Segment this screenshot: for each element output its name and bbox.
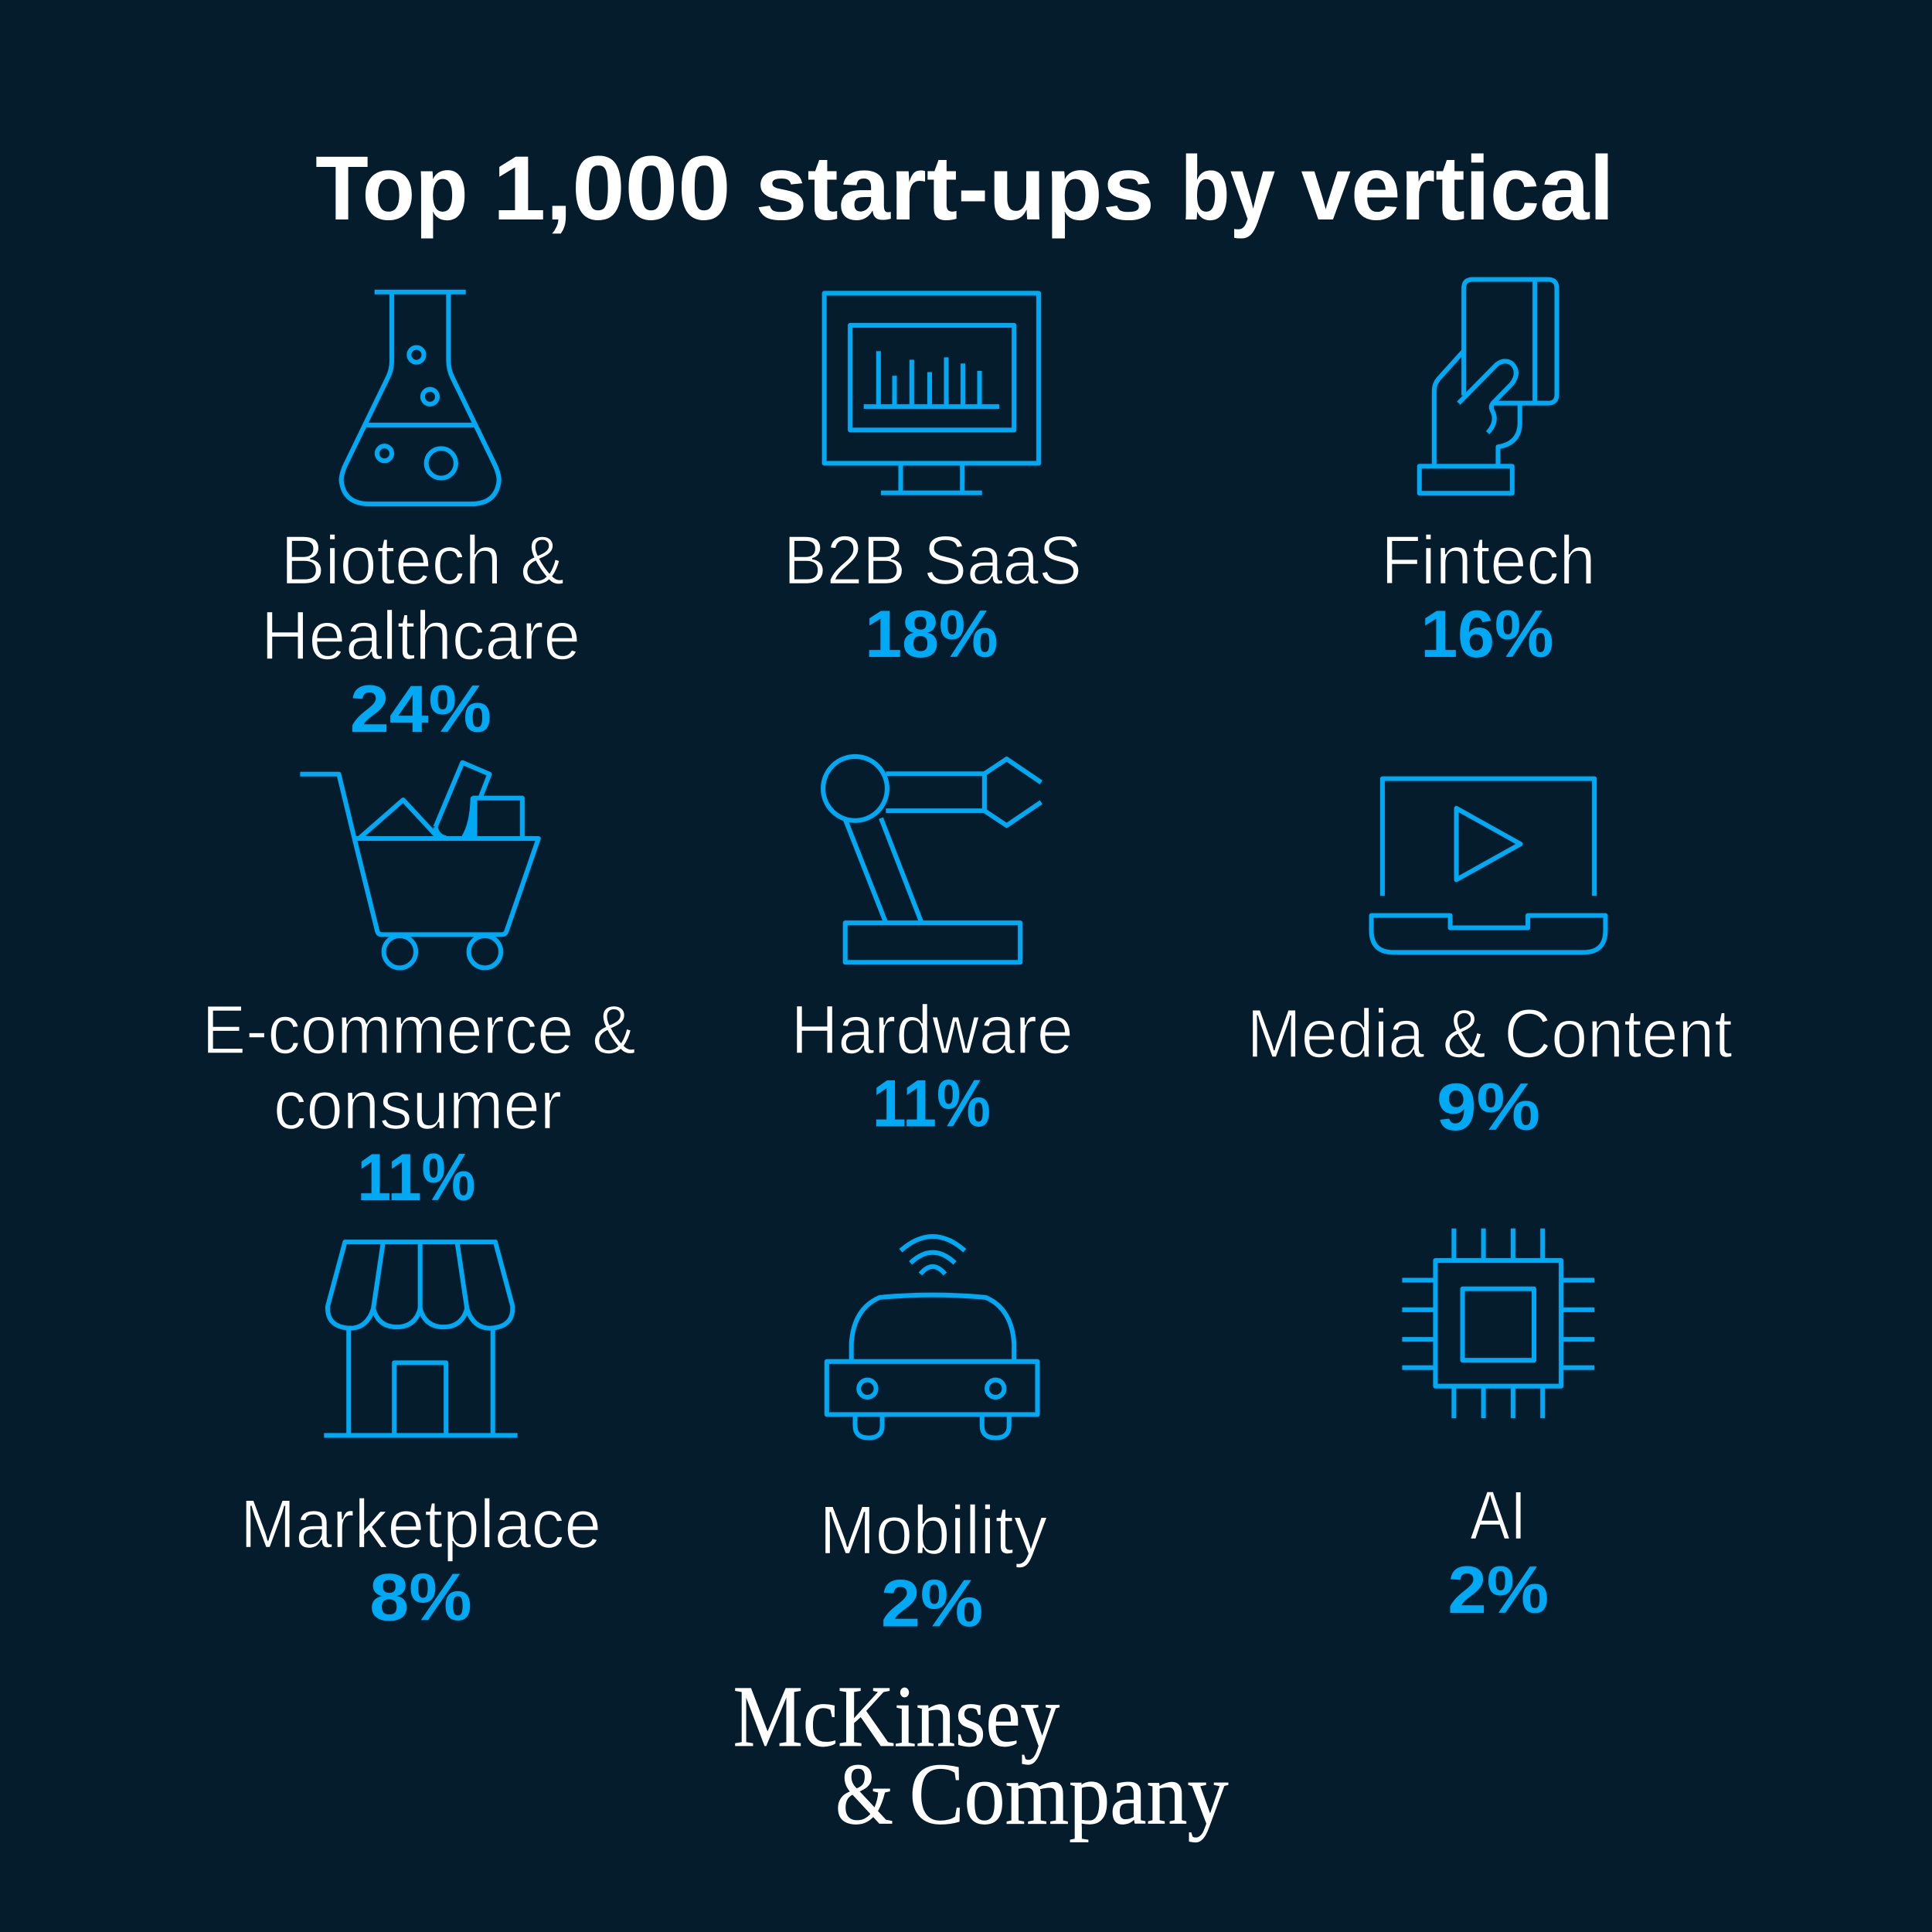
panel: B2B SaaS [784,293,1082,672]
title [315,138,1614,240]
title: by [1180,138,1275,240]
icon: storefront [324,1242,518,1435]
icon: monitor with bar chart [825,293,1039,493]
panel: Media & Content [1247,779,1733,1145]
value: 18%: 18% [865,597,998,672]
label: Hardware: Hardware [791,991,1073,1068]
title: 1,000 [493,138,730,240]
label: B2B SaaS: B2B SaaS [784,522,1082,599]
icon: hand holding card [1420,280,1557,493]
label: AI: AI [1470,1476,1526,1553]
icon: laptop with play button [1372,779,1605,952]
logo: McKinsey & Company [733,1668,1229,1843]
label: E-commerce &: E-commerce & [202,991,636,1068]
icon: shopping cart [300,763,539,968]
icon: robot arm [823,757,1041,962]
label: Mobility: Mobility [819,1492,1048,1569]
panel: E-commerce & consumer [202,763,636,1215]
label: Media & Content: Media & Content [1247,995,1733,1072]
icon: microchip [1402,1229,1594,1418]
icon: connected car [827,1236,1037,1438]
value: 2%: 2% [1447,1553,1549,1628]
title: Top [315,138,468,240]
label: Marketplace: Marketplace [240,1485,601,1563]
title: start-ups [755,138,1155,240]
panel: Hardware [791,757,1073,1141]
label line: consumer: consumer [274,1066,562,1143]
value: 24%: 24% [350,672,492,747]
value: 11%: 11% [357,1141,475,1215]
label: Biotech &: Biotech & [281,522,564,599]
logo: McKinsey & Company: McKinsey [733,1668,1060,1765]
panel: AI [1402,1229,1594,1628]
logo: McKinsey & Company: Company [910,1747,1229,1843]
label line: Healthcare: Healthcare [261,597,580,674]
value: 9%: 9% [1437,1070,1540,1145]
panel: Biotech & Healthcare [261,292,580,747]
title: vertical [1301,138,1614,240]
icon: flask [342,292,499,504]
panel: Fintech [1381,280,1596,672]
value: 16%: 16% [1420,597,1554,672]
value: 2%: 2% [881,1567,983,1641]
panel: Marketplace [240,1242,601,1635]
logo: McKinsey & Company: & [835,1747,893,1843]
label: Fintech: Fintech [1381,522,1596,599]
value: 8%: 8% [369,1561,472,1635]
value: 11%: 11% [872,1066,991,1141]
panel: Mobility [819,1236,1048,1641]
